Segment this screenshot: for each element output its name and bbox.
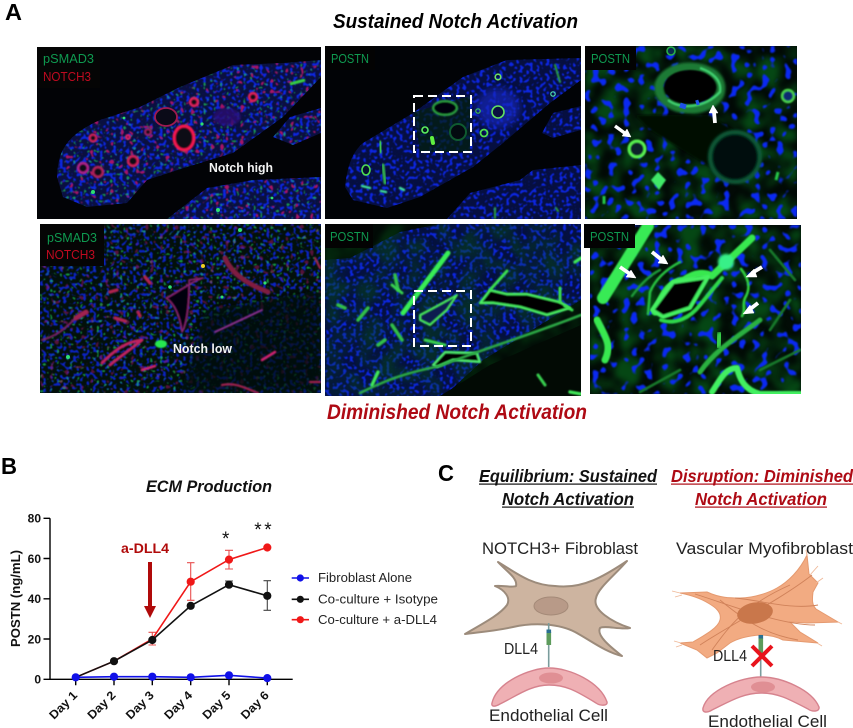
- y axis tick labels: 60: [28, 552, 41, 566]
- x axis tick labels: Day 2: [85, 688, 119, 722]
- x axis tick labels: Day 1: [46, 688, 80, 722]
- label: pSMAD3 NOTCH3: [44, 54, 94, 81]
- stress fibres: [672, 550, 842, 650]
- y axis tick labels: 20: [28, 632, 41, 646]
- series: co-culture + isotype: [76, 581, 271, 677]
- micrograph: pSMAD3 NOTCH3 Notch low: [40, 224, 321, 393]
- series: fibroblast alone: [72, 672, 271, 682]
- y axis tick labels: 40: [28, 592, 41, 606]
- diagram: vascular myofibroblast: [672, 550, 842, 658]
- heading: diminished notch activation: Diminished Notch Activation: [327, 401, 587, 424]
- legend: fibroblast alone: Fibroblast Alone: [318, 571, 412, 585]
- label: DLL4: DLL4: [713, 648, 747, 665]
- x axis tick labels: Day 5: [200, 688, 234, 722]
- heading: sustained notch activation: Sustained Notch Activation: [333, 11, 578, 33]
- broken connector: [758, 635, 763, 677]
- nucleus: [735, 600, 775, 626]
- label: POSTN: POSTN: [591, 51, 630, 66]
- label: POSTN: [585, 46, 636, 70]
- label: Notch high: Notch high: [209, 160, 273, 175]
- significance stars: *: [222, 529, 230, 550]
- receptor-ligand connector: DLL4: [546, 623, 551, 667]
- micrograph: pSMAD3 NOTCH3 Notch high: [37, 47, 321, 219]
- arrow: [615, 126, 631, 137]
- label: pSMAD3 NOTCH3: [40, 224, 104, 266]
- y axis title: POSTN (ng/mL): [9, 550, 23, 647]
- label: POSTN: POSTN: [331, 51, 369, 66]
- label: POSTN: [584, 224, 635, 248]
- cell label: vascular myofibroblast: Vascular Myofibroblast: [676, 539, 853, 558]
- x axis tick labels: [46, 688, 272, 722]
- label: POSTN: POSTN: [590, 229, 629, 244]
- micrograph: POSTN sustained overview: [325, 46, 581, 219]
- chart legend: [292, 571, 438, 627]
- label: DLL4: DLL4: [504, 641, 538, 658]
- arrow: [620, 267, 636, 278]
- panel label B: B: [1, 453, 17, 479]
- heading: disruption: Notch Activation: [695, 489, 827, 509]
- label: pSMAD3 NOTCH3: pSMAD3: [47, 230, 97, 245]
- arrow: a-DLL4 treatment: [144, 562, 156, 618]
- diagram: endothelial cell: [703, 677, 819, 712]
- nucleus: [539, 672, 563, 684]
- annotation: a-DLL4: a-DLL4: [121, 540, 169, 556]
- heading: equilibrium: [479, 466, 657, 509]
- label: POSTN: POSTN: [330, 229, 369, 244]
- label: pSMAD3 NOTCH3: pSMAD3: [43, 51, 94, 66]
- arrow: [709, 105, 718, 123]
- x axis tick labels: Day 4: [161, 688, 195, 722]
- label: pSMAD3 NOTCH3: NOTCH3: [43, 69, 91, 84]
- y axis tick labels: [28, 512, 41, 686]
- y axis tick labels: 80: [28, 512, 41, 526]
- significance stars: [222, 520, 272, 550]
- label: POSTN: [332, 54, 368, 63]
- label: POSTN: [325, 224, 373, 248]
- heading: disruption: [671, 466, 853, 509]
- chart title: ECM Production: [146, 477, 272, 496]
- legend: isotype: Co-culture + Isotype: [318, 592, 438, 606]
- x axis tick labels: Day 6: [238, 688, 272, 722]
- nucleus: [534, 597, 568, 615]
- label: endothelial cell: Endothelial Cell: [489, 706, 608, 725]
- arrow: [652, 252, 668, 264]
- micrograph: POSTN sustained zoom: [585, 46, 797, 219]
- heading: equilibrium: Notch Activation: [502, 489, 634, 509]
- y axis tick labels: 0: [34, 672, 41, 686]
- axes: [44, 518, 293, 685]
- nucleus: [751, 682, 775, 692]
- cell label: NOTCH3+ fibroblast: NOTCH3+ Fibroblast: [482, 539, 638, 558]
- panel label C: C: [438, 460, 454, 486]
- legend: a-DLL4: Co-culture + a-DLL4: [318, 613, 437, 627]
- label: pSMAD3 NOTCH3: NOTCH3: [46, 247, 95, 262]
- micrograph: POSTN diminished overview: [325, 224, 581, 396]
- heading: equilibrium: Equilibrium: Sustained: [479, 466, 657, 486]
- arrow: [743, 303, 758, 314]
- series: co-culture + a-DLL4: [76, 544, 271, 677]
- micrograph: POSTN diminished zoom: [590, 225, 801, 394]
- significance stars: *: [254, 520, 262, 541]
- dashed inset box: [414, 291, 471, 346]
- diagram: endothelial cell: [492, 668, 607, 706]
- significance stars: *: [264, 520, 272, 541]
- dashed inset box: [414, 96, 471, 152]
- x axis tick labels: Day 3: [123, 688, 157, 722]
- arrow: [746, 267, 762, 277]
- label: Notch low: Notch low: [173, 341, 233, 356]
- diagram: NOTCH3+ fibroblast: [465, 561, 630, 656]
- line chart: POSTN over days: [9, 512, 293, 722]
- icon: red cross: [752, 646, 772, 666]
